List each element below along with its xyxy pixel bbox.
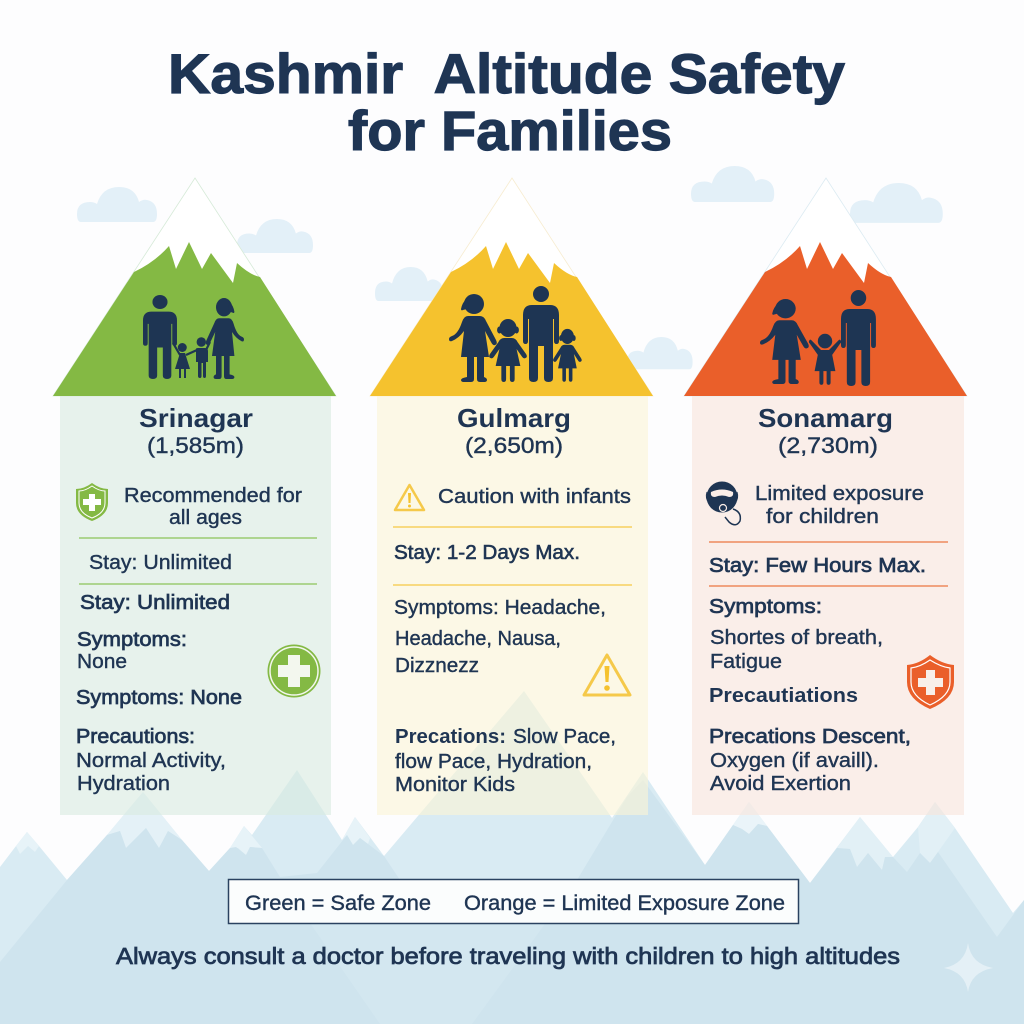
altitude: Gulmarg: (2,650m) [465, 433, 563, 458]
location name: Srinagar: Srinagar [139, 403, 253, 433]
precautions text [395, 726, 616, 796]
symptoms text: Shortes of breath, [710, 627, 883, 649]
legend box: Green = Safe Zone [245, 892, 431, 915]
mountain: Srinagar [53, 178, 336, 396]
legend box: Orange = Limited Exposure Zone [464, 892, 785, 915]
recommendation text: all ages [169, 507, 242, 529]
precautions text: Normal Activity, [76, 750, 226, 772]
panel: Sonamarg [684, 178, 967, 815]
icon: green medical cross [268, 644, 320, 698]
icon: orange shield [907, 655, 954, 709]
caution text: Caution with infants [438, 486, 631, 508]
footer note: Always consult a doctor before traveling with children to high altitudes [116, 943, 900, 969]
precautions text [76, 726, 226, 795]
panel background: Sonamarg [692, 396, 964, 815]
symptoms text [709, 596, 883, 673]
title: for Families [348, 99, 672, 162]
icon: oxygen mask [706, 482, 740, 525]
recommendation text: Recommended for [124, 485, 302, 507]
stay text: Stay: 1-2 Days Max. [394, 542, 580, 564]
legend box [228, 880, 798, 924]
symptoms text: Dizznezz [395, 655, 479, 677]
altitude: Srinagar: (1,585m) [147, 433, 244, 458]
location name: Sonamarg: Sonamarg [758, 403, 893, 433]
panel: Srinagar [53, 178, 336, 815]
precautions text: Avoid Exertion [710, 773, 851, 795]
icon: green shield [76, 483, 108, 521]
symptoms text: Fatigue [710, 651, 782, 673]
symptoms text: Symptoms: Headache, [394, 597, 606, 619]
precautions text: Monitor Kids [395, 774, 515, 796]
panel background: Srinagar [60, 396, 331, 815]
background clouds [77, 166, 943, 369]
precautions text [709, 726, 911, 795]
precautiations label: Precautiations [709, 685, 858, 707]
precautions text: Precations: [395, 726, 506, 748]
symptoms text: None [77, 651, 127, 673]
stay text: Stay: Few Hours Max. [709, 555, 926, 577]
recommendation text [124, 485, 302, 529]
title: Kashmir Altitude Safety [168, 42, 845, 105]
family icon: Srinagar [143, 295, 244, 379]
precautions text: Hydration [77, 773, 170, 795]
symptoms text [77, 629, 187, 673]
symptoms text: Symptoms: [77, 629, 187, 651]
symptoms text repeated: Symptoms: None [76, 687, 242, 709]
limited exposure text: Limited exposure [755, 483, 924, 505]
precautions text: Precations Descent, [709, 726, 911, 748]
symptoms text: Symptoms: [709, 596, 822, 618]
title [168, 42, 845, 162]
icon: sparkle [944, 943, 993, 992]
icon: small warning triangle [395, 485, 424, 510]
family icon: Sonamarg [760, 290, 876, 386]
precautions text: Oxygen (if availl). [710, 750, 879, 772]
precautions text: Slow Pace, [513, 726, 616, 748]
altitude: Sonamarg: (2,730m) [778, 433, 878, 458]
stay text repeated: Stay: Unlimited [80, 592, 230, 614]
limited exposure text [755, 483, 924, 528]
mountain: Sonamarg [684, 178, 967, 396]
limited exposure text: for children [766, 506, 879, 528]
stay text: Stay: Unlimited [89, 552, 232, 574]
symptoms text: Headache, Nausa, [395, 628, 561, 650]
mountain: Gulmarg [370, 178, 653, 396]
family icon: Gulmarg [449, 286, 582, 382]
location name: Gulmarg: Gulmarg [457, 403, 571, 433]
symptoms text [394, 597, 606, 677]
panel: Gulmarg [370, 178, 653, 815]
icon: large warning triangle [584, 655, 630, 695]
panel background: Gulmarg [377, 396, 648, 815]
precautions text: flow Pace, Hydration, [395, 751, 592, 773]
background mountain range [0, 691, 1024, 1024]
precautions text: Precautions: [76, 726, 195, 748]
